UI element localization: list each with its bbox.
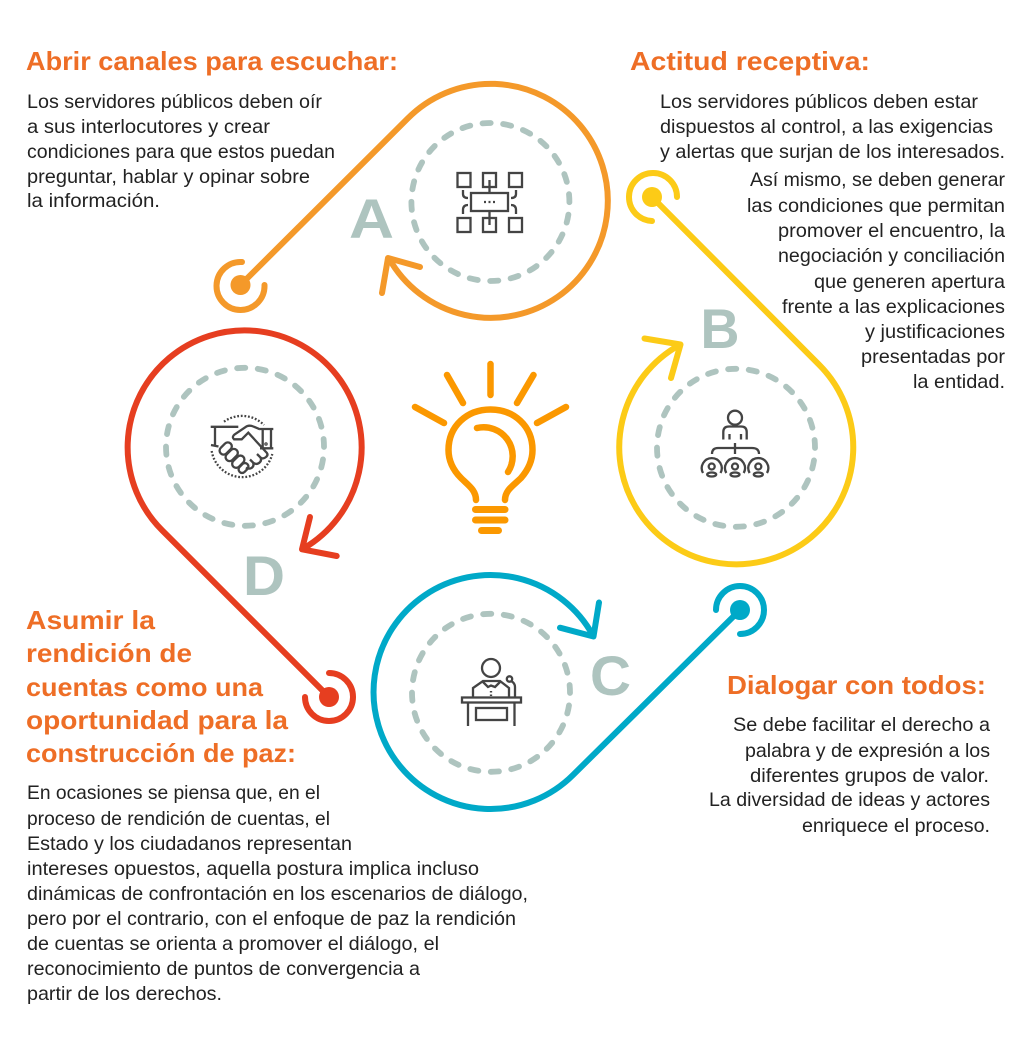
letter D: D	[243, 544, 285, 607]
letter B: B	[700, 297, 740, 360]
heading: Asumir la rendición de cuentas	[26, 605, 296, 768]
text block: Asumir la rendición: intereses opuestos, aquella postura implica incluso	[27, 858, 479, 880]
heading: Abrir canales para escuchar: Abrir canales para escuchar:	[26, 46, 398, 76]
text block: Actitud receptiva: que generen apertura	[814, 271, 1005, 293]
text block: Asumir la rendición: reconocimiento de puntos de convergencia a	[27, 958, 420, 980]
dashed ring A	[411, 123, 569, 281]
cycle step D: red loop	[128, 330, 362, 721]
text block: Abrir canales	[27, 91, 335, 212]
text block: Abrir canales: Los servidores públicos deben oír	[27, 91, 323, 113]
heading: Asumir la rendición de cuentas: Asumir la	[26, 605, 156, 635]
text block: Abrir canales: preguntar, hablar y opinar sobre	[27, 166, 310, 188]
text block: Asumir la rendición: En ocasiones se piensa que, en el	[27, 782, 320, 804]
text block: Dialogar: Se debe facilitar el derecho a	[733, 714, 990, 736]
icon: handshake	[211, 416, 273, 477]
text block: Actitud receptiva: las condiciones que permitan	[747, 195, 1005, 217]
text block: Dialogar: enriquece el proceso.	[802, 815, 990, 837]
dashed ring B	[657, 369, 815, 527]
icon: network diagram	[458, 173, 522, 232]
cycle step B: yellow loop	[619, 173, 853, 564]
text block: Asumir la rendición: dinámicas de confrontación en los escenarios de diálogo,	[27, 883, 528, 905]
text block: Asumir la rendición: proceso de rendición de cuentas, el	[27, 808, 330, 830]
text block: Actitud receptiva: y alertas que surjan de los interesados.	[660, 141, 1005, 163]
dashed ring D	[166, 368, 324, 526]
heading: Dialogar con todos: Dialogar con todos:	[727, 670, 986, 700]
text block: Actitud receptiva	[660, 91, 1006, 393]
text block: Abrir canales: a sus interlocutores y crear	[27, 116, 271, 138]
dashed ring C	[412, 614, 570, 772]
cycle step A: orange loop	[217, 84, 608, 318]
text block: Actitud receptiva: Los servidores públicos deben estar	[660, 91, 979, 113]
text block: Asumir la rendición: de cuentas se orienta a promover el diálogo, el	[27, 933, 439, 955]
icon: hierarchy of people	[702, 411, 768, 476]
text block: Actitud receptiva: presentadas por	[861, 346, 1006, 368]
text block: Actitud receptiva: frente a las explicaciones	[782, 296, 1005, 318]
letter A: A	[349, 187, 394, 250]
text block: Abrir canales: condiciones para que estos puedan	[27, 141, 335, 163]
heading: Asumir la rendición de cuentas: construcción de paz:	[26, 738, 296, 768]
icon: light bulb	[415, 364, 566, 530]
heading: Asumir la rendición de cuentas: oportunidad para la	[26, 705, 289, 735]
text block: Abrir canales: la información.	[27, 190, 160, 212]
text block: Dialogar	[709, 714, 990, 837]
heading: Asumir la rendición de cuentas: cuentas como una	[26, 672, 264, 702]
text block: Dialogar: diferentes grupos de valor.	[750, 765, 989, 787]
text block: Actitud receptiva: Así mismo, se deben generar	[750, 169, 1005, 191]
text block: Asumir la rendición: Estado y los ciudadanos representan	[27, 833, 352, 855]
text block: Actitud receptiva: dispuestos al control, a las exigencias	[660, 116, 993, 138]
heading: Asumir la rendición de cuentas: rendición de	[26, 638, 192, 668]
text block: Dialogar: La diversidad de ideas y actores	[709, 789, 990, 811]
text block: Actitud receptiva: y justificaciones	[865, 321, 1005, 343]
text block: Dialogar: palabra y de expresión a los	[745, 740, 990, 762]
icon: speaker at podium	[462, 659, 521, 726]
text block: Actitud receptiva: la entidad.	[913, 371, 1005, 393]
text block: Actitud receptiva: promover el encuentro, la	[778, 220, 1005, 242]
text block: Asumir la rendición: partir de los derechos.	[27, 983, 222, 1005]
heading: Actitud receptiva: Actitud receptiva:	[630, 46, 870, 76]
text block: Asumir la rendición	[27, 782, 528, 1005]
text block: Actitud receptiva: negociación y conciliación	[778, 245, 1005, 267]
cycle step C: blue loop	[374, 575, 764, 809]
letter C: C	[590, 644, 631, 707]
text block: Asumir la rendición: pero por el contrario, con el enfoque de paz la rendición	[27, 908, 516, 930]
